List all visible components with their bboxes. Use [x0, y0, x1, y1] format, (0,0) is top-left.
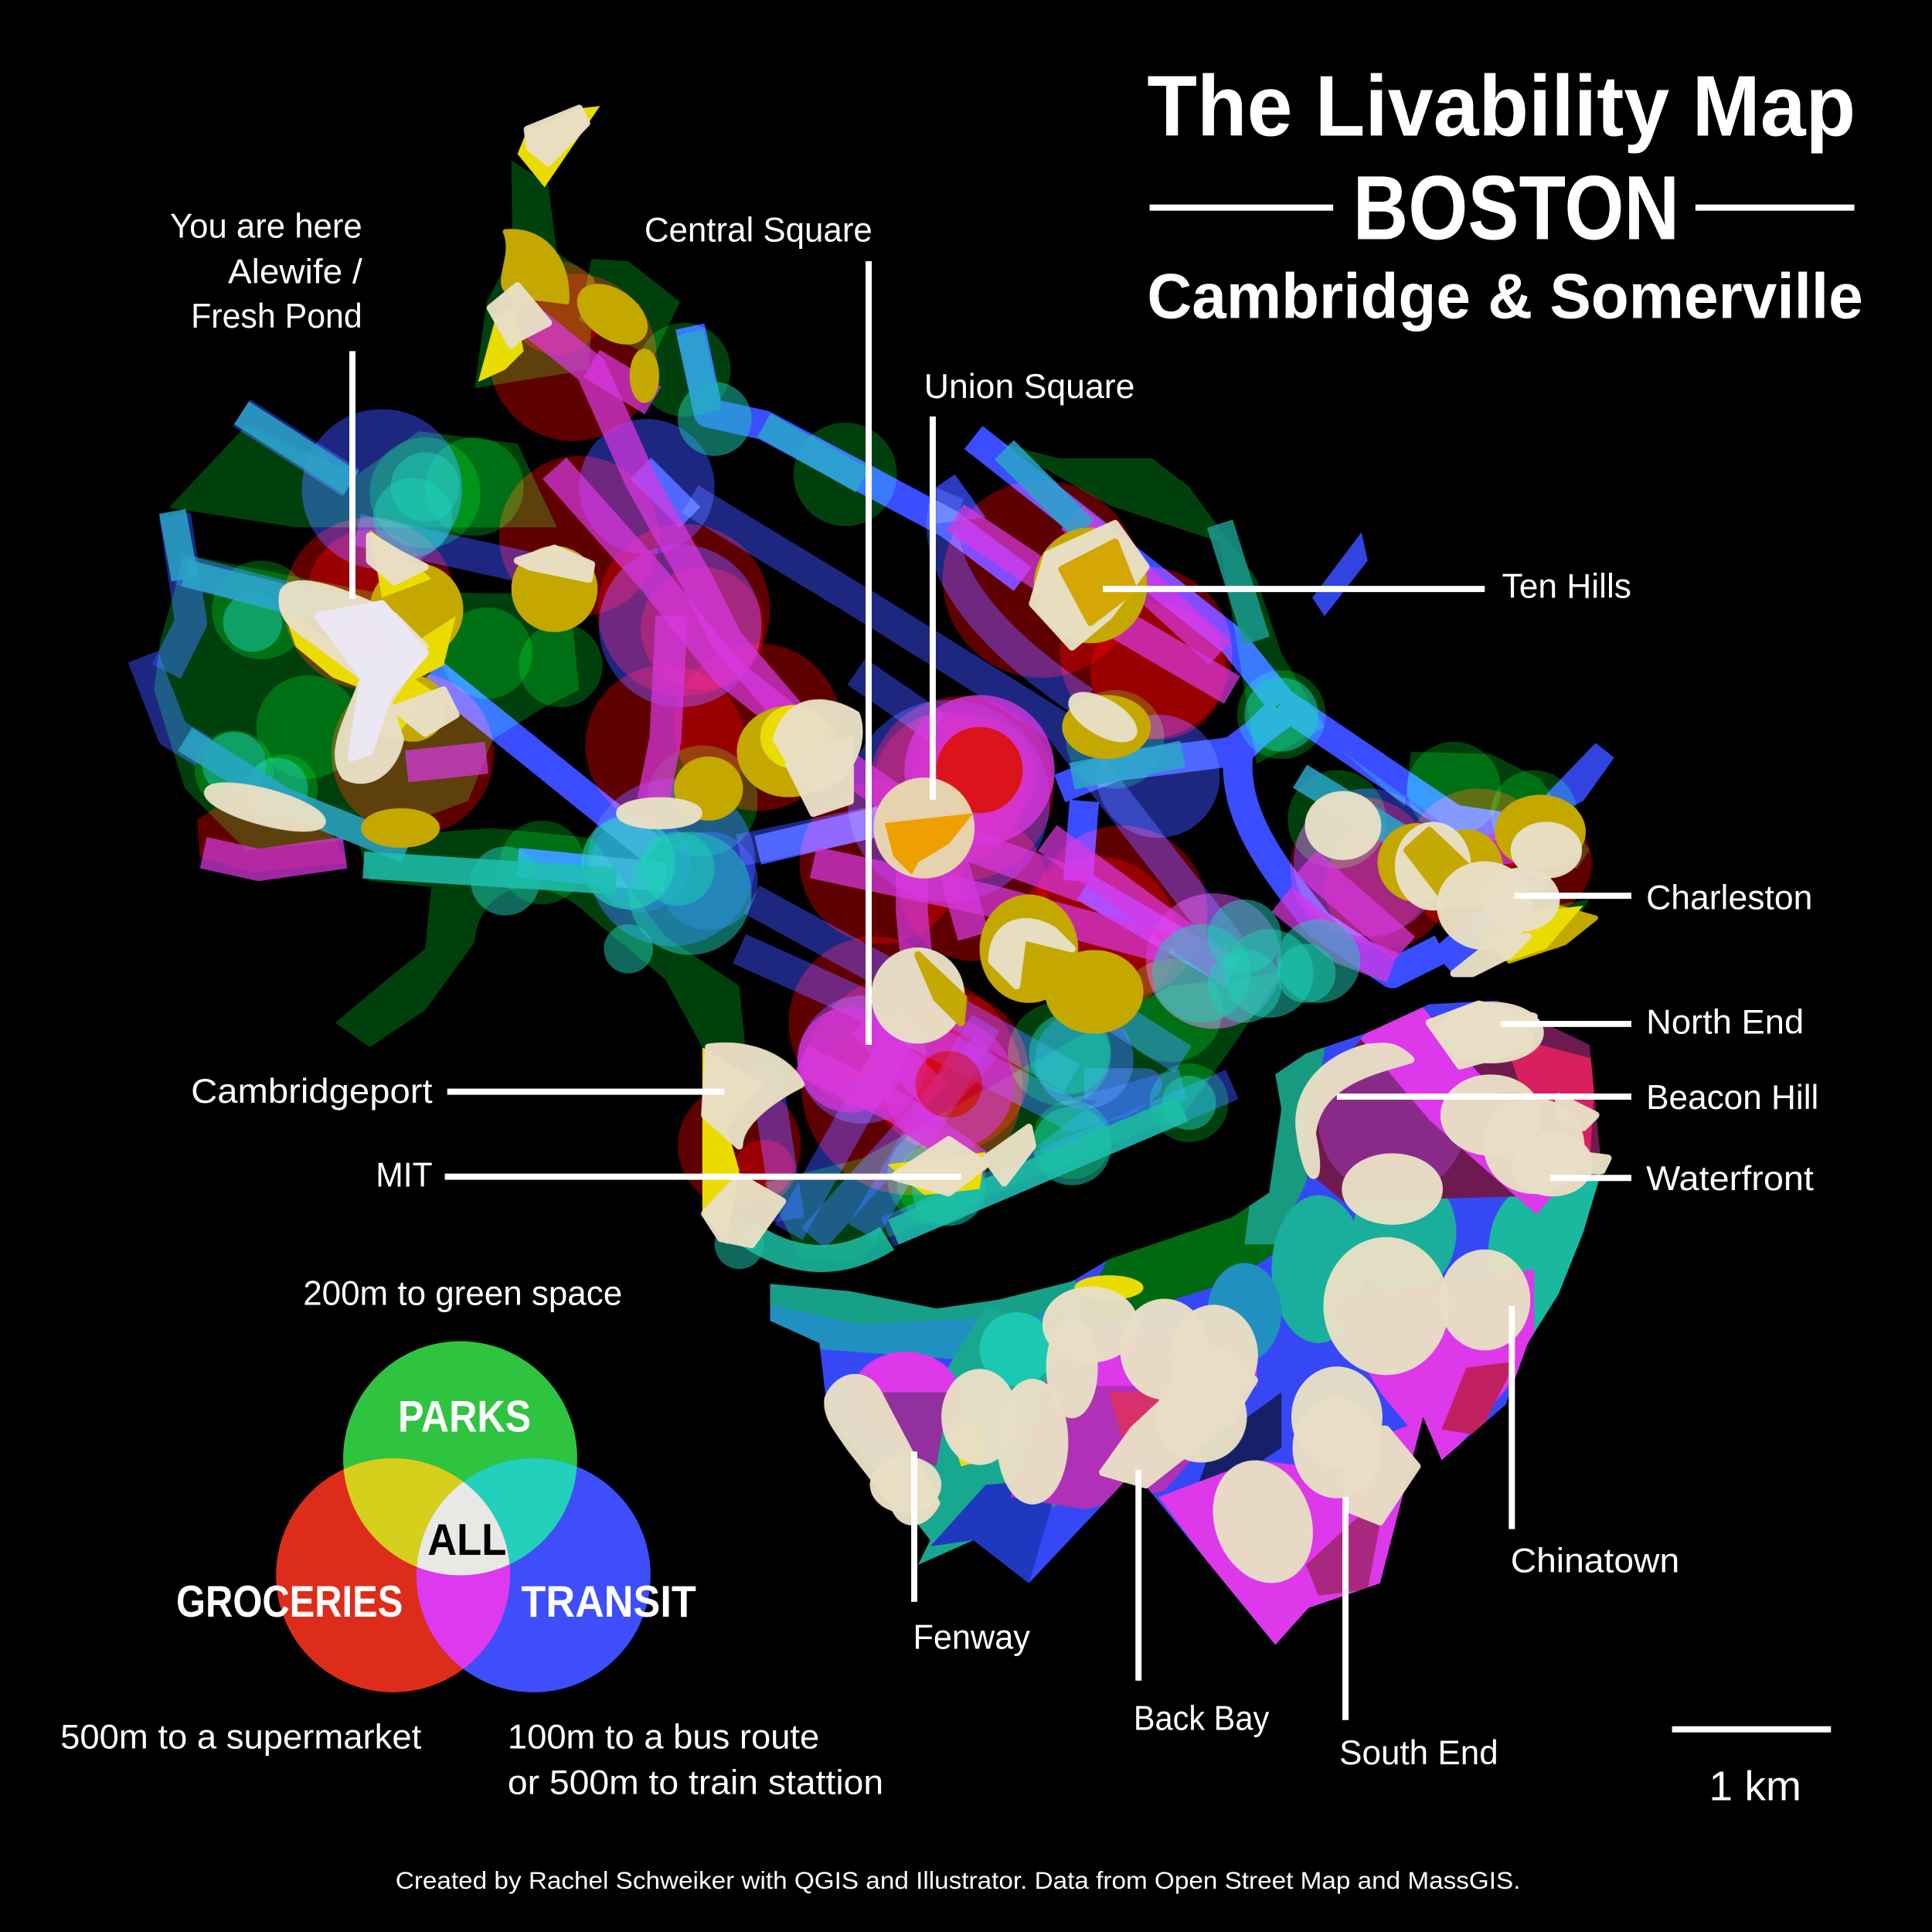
groceries layer [197, 261, 1592, 1207]
label: beacon hill: Beacon Hill [1646, 1079, 1818, 1117]
venn: transit circle [417, 1458, 651, 1692]
label: alewife: Alewife / [228, 253, 362, 291]
transit routes bright [431, 327, 1577, 974]
scale bar [1672, 1726, 1831, 1809]
magenta overlap routes [203, 318, 1577, 1171]
legend text train: or 500m to train stattion [508, 1764, 883, 1801]
boston: beacon hill [1306, 1001, 1602, 1202]
venn label all: ALL [427, 1515, 506, 1565]
teal corridors [172, 332, 1441, 1259]
label: chinatown: Chinatown [1511, 1542, 1679, 1580]
title rule right [1696, 205, 1855, 211]
parks layer [154, 160, 1590, 1263]
place labels [170, 208, 1818, 1772]
label: union square: Union Square [924, 368, 1134, 406]
venn legend [60, 1274, 883, 1801]
boston: fenway teal [918, 1317, 1057, 1565]
leader lines [352, 261, 1631, 1720]
boston: teal river edge [770, 1280, 1074, 1359]
boston: fenway magenta [858, 1352, 957, 1434]
livability map [143, 106, 1627, 1675]
boston: back bay magenta [1010, 1379, 1190, 1510]
label: south end: South End [1339, 1734, 1498, 1772]
venn: groceries circle [276, 1458, 510, 1692]
label: ten hills: Ten Hills [1502, 567, 1631, 605]
boston: south end magenta [1368, 1269, 1535, 1461]
title rule left [1150, 205, 1333, 211]
venn: parks and transit [417, 1458, 577, 1567]
title line 2: BOSTON [1353, 157, 1679, 259]
label: waterfront: Waterfront [1646, 1160, 1815, 1198]
title block [1147, 57, 1863, 332]
label: you are here: You are here [170, 208, 362, 246]
label: charleston: Charleston [1646, 879, 1812, 917]
scale bar: 1 km [1709, 1763, 1801, 1809]
title line 3: Cambridge & Somerville [1147, 260, 1863, 332]
legend text green: 200m to green space [303, 1274, 622, 1312]
label: north end: North End [1646, 1004, 1804, 1042]
venn: parks circle [343, 1341, 577, 1575]
venn: parks and groceries [343, 1458, 464, 1567]
legend text supermarket: 500m to a supermarket [60, 1718, 422, 1756]
title line 1: The Livability Map [1147, 57, 1855, 154]
cream all-three areas [204, 108, 1608, 1593]
boston section [770, 1000, 1601, 1645]
label: back bay: Back Bay [1134, 1700, 1270, 1738]
transit coverage circles [302, 409, 1614, 1124]
yellow overlap areas [363, 231, 1596, 1032]
legend text bus: 100m to a bus route [508, 1718, 819, 1756]
teal hubs [202, 382, 1360, 1269]
label: fenway: Fenway [913, 1618, 1031, 1656]
transit routes faint [143, 413, 1232, 1238]
venn: groceries and transit [416, 1481, 510, 1669]
venn label transit: TRANSIT [521, 1577, 696, 1627]
venn label groceries: GROCERIES [176, 1577, 403, 1627]
venn label parks: PARKS [398, 1393, 531, 1442]
bright yellow areas [281, 106, 1583, 1466]
orange centre at Union Square [873, 777, 975, 879]
label: mit: MIT [376, 1156, 433, 1194]
label: central square: Central Square [645, 211, 872, 249]
credits: Created by Rachel Schweiker with QGIS and Illustrator. Data from Open Street Map and MassGIS. [396, 1866, 1520, 1894]
label: cambridgeport: Cambridgeport [191, 1073, 433, 1111]
label: fresh pond: Fresh Pond [191, 298, 362, 335]
venn: all overlap [417, 1481, 510, 1575]
